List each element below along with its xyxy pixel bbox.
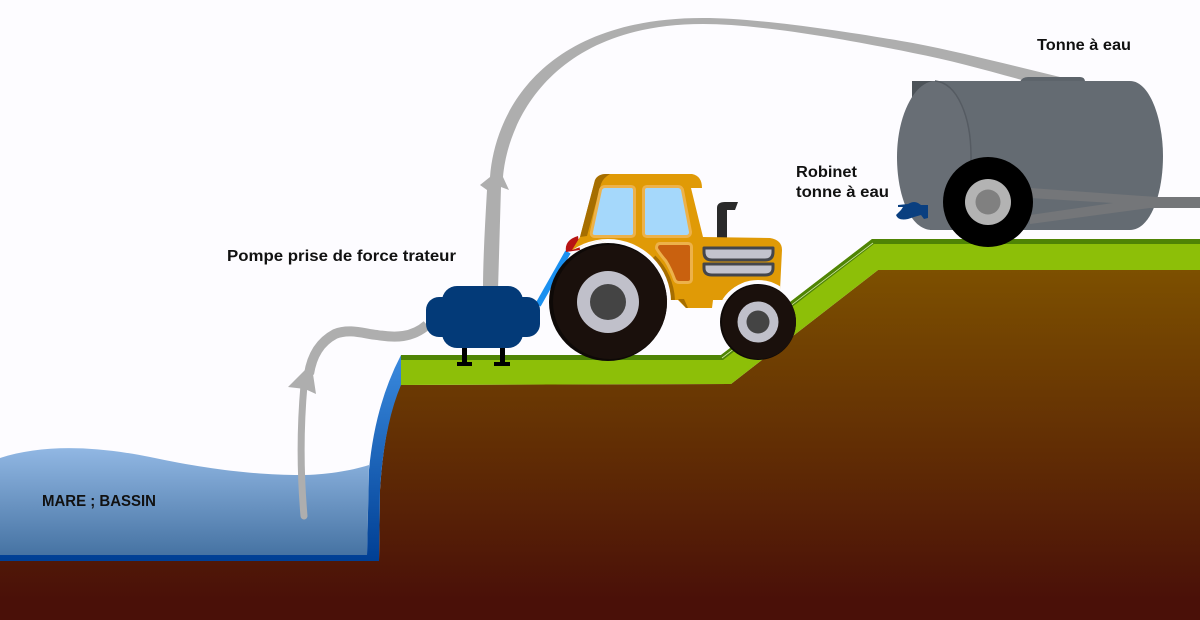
tractor windows: [593, 188, 689, 235]
tractor tail light: [566, 236, 580, 252]
tank drawbar: [1030, 188, 1200, 224]
tractor body: [572, 174, 782, 308]
hose: pond to pump with arrow: [288, 325, 427, 516]
tractor exhaust: [717, 202, 738, 238]
water tank: [897, 77, 1163, 230]
tank wheel: [943, 157, 1033, 247]
tractor grille: [704, 248, 773, 275]
icon: tank faucet: [896, 202, 928, 220]
label: pond: MARE ; BASSIN: [42, 493, 156, 510]
label: tank: Tonne à eau: [1037, 37, 1131, 54]
pond liner wall: [0, 355, 401, 561]
label: faucet: tonne à eau: [796, 184, 889, 201]
PTO pump: [426, 286, 540, 366]
label: faucet: Robinet: [796, 164, 858, 181]
tractor: [545, 174, 800, 365]
soil ground: [0, 270, 1200, 620]
hose: pump to tank with arrow: [480, 18, 1060, 290]
label: pump: Pompe prise de force trateur: [227, 248, 456, 265]
wheel arches: [572, 239, 780, 300]
front wheel: [720, 284, 796, 360]
grass terrace: [401, 239, 1200, 385]
pump drive shaft: [538, 252, 568, 305]
tractor body shade: [580, 174, 688, 308]
rear wheel: [549, 243, 667, 361]
pond water: [0, 448, 369, 555]
tractor door panel: [658, 245, 690, 281]
